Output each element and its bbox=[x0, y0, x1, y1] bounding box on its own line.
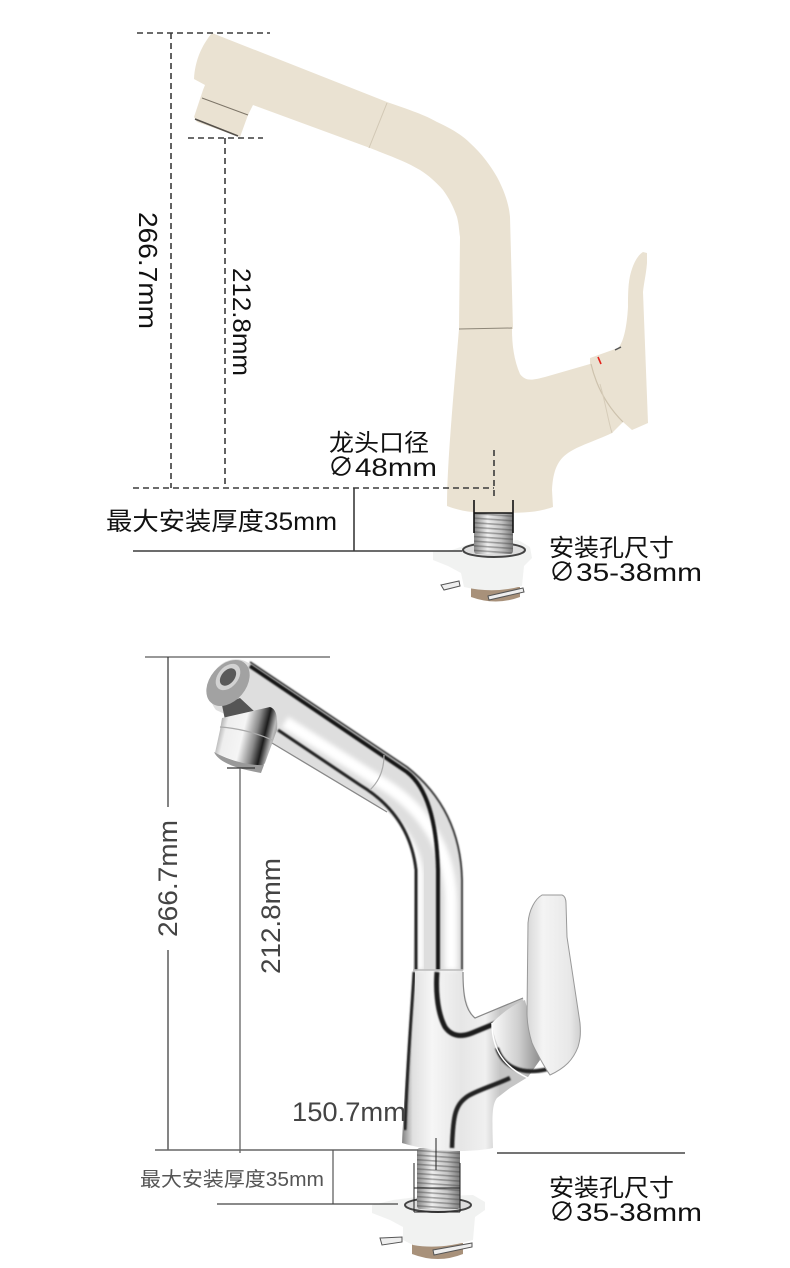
panel: beige faucet diagram bbox=[106, 33, 702, 602]
label: install hole size: ∅ bbox=[549, 1197, 575, 1227]
dimension lines: beige faucet bbox=[133, 33, 513, 551]
label: max install thickness: 最大安装厚度35mm bbox=[140, 1168, 324, 1191]
label: 266.7mm height: 266.7mm bbox=[133, 212, 163, 329]
panel: chrome faucet diagram bbox=[140, 652, 702, 1259]
label: faucet diameter: ∅ bbox=[328, 452, 354, 482]
chrome faucet handle bbox=[492, 895, 580, 1078]
spout head nozzle bbox=[222, 698, 255, 720]
label: 150.7mm width: 150.7mm bbox=[292, 1097, 406, 1127]
label: faucet diameter bbox=[328, 430, 437, 482]
mounting hardware: chrome faucet bbox=[372, 1195, 485, 1259]
label: faucet diameter: 龙头口径 bbox=[329, 430, 429, 457]
label: max install thickness: 最大安装厚度35mm bbox=[106, 508, 337, 536]
label: install hole size: 安装孔尺寸 bbox=[549, 1175, 674, 1202]
label: install hole size: 35-38mm bbox=[576, 559, 702, 587]
dimension lines: chrome faucet bbox=[145, 657, 685, 1212]
label: install hole size: ∅ bbox=[549, 557, 575, 587]
label: 266.7mm height: 266.7mm bbox=[153, 820, 183, 937]
chrome faucet base and neck bbox=[402, 970, 530, 1151]
beige faucet body bbox=[194, 33, 648, 513]
label: 212.8mm height: 212.8mm bbox=[227, 268, 255, 376]
label: faucet diameter: 48mm bbox=[355, 454, 437, 482]
label: install hole size: 安装孔尺寸 bbox=[549, 535, 674, 562]
label: install hole size: 35-38mm bbox=[576, 1199, 702, 1227]
threaded stem: chrome faucet bbox=[417, 1148, 460, 1209]
red indicator bbox=[598, 357, 601, 364]
threaded stem: beige faucet bbox=[474, 508, 513, 554]
label: 212.8mm height: 212.8mm bbox=[256, 858, 286, 974]
mounting hardware: beige faucet bbox=[433, 540, 532, 602]
chrome faucet spout bbox=[197, 652, 463, 970]
label: install hole size bbox=[549, 1175, 702, 1227]
label: install hole size bbox=[549, 535, 702, 587]
aerator bbox=[215, 707, 277, 770]
